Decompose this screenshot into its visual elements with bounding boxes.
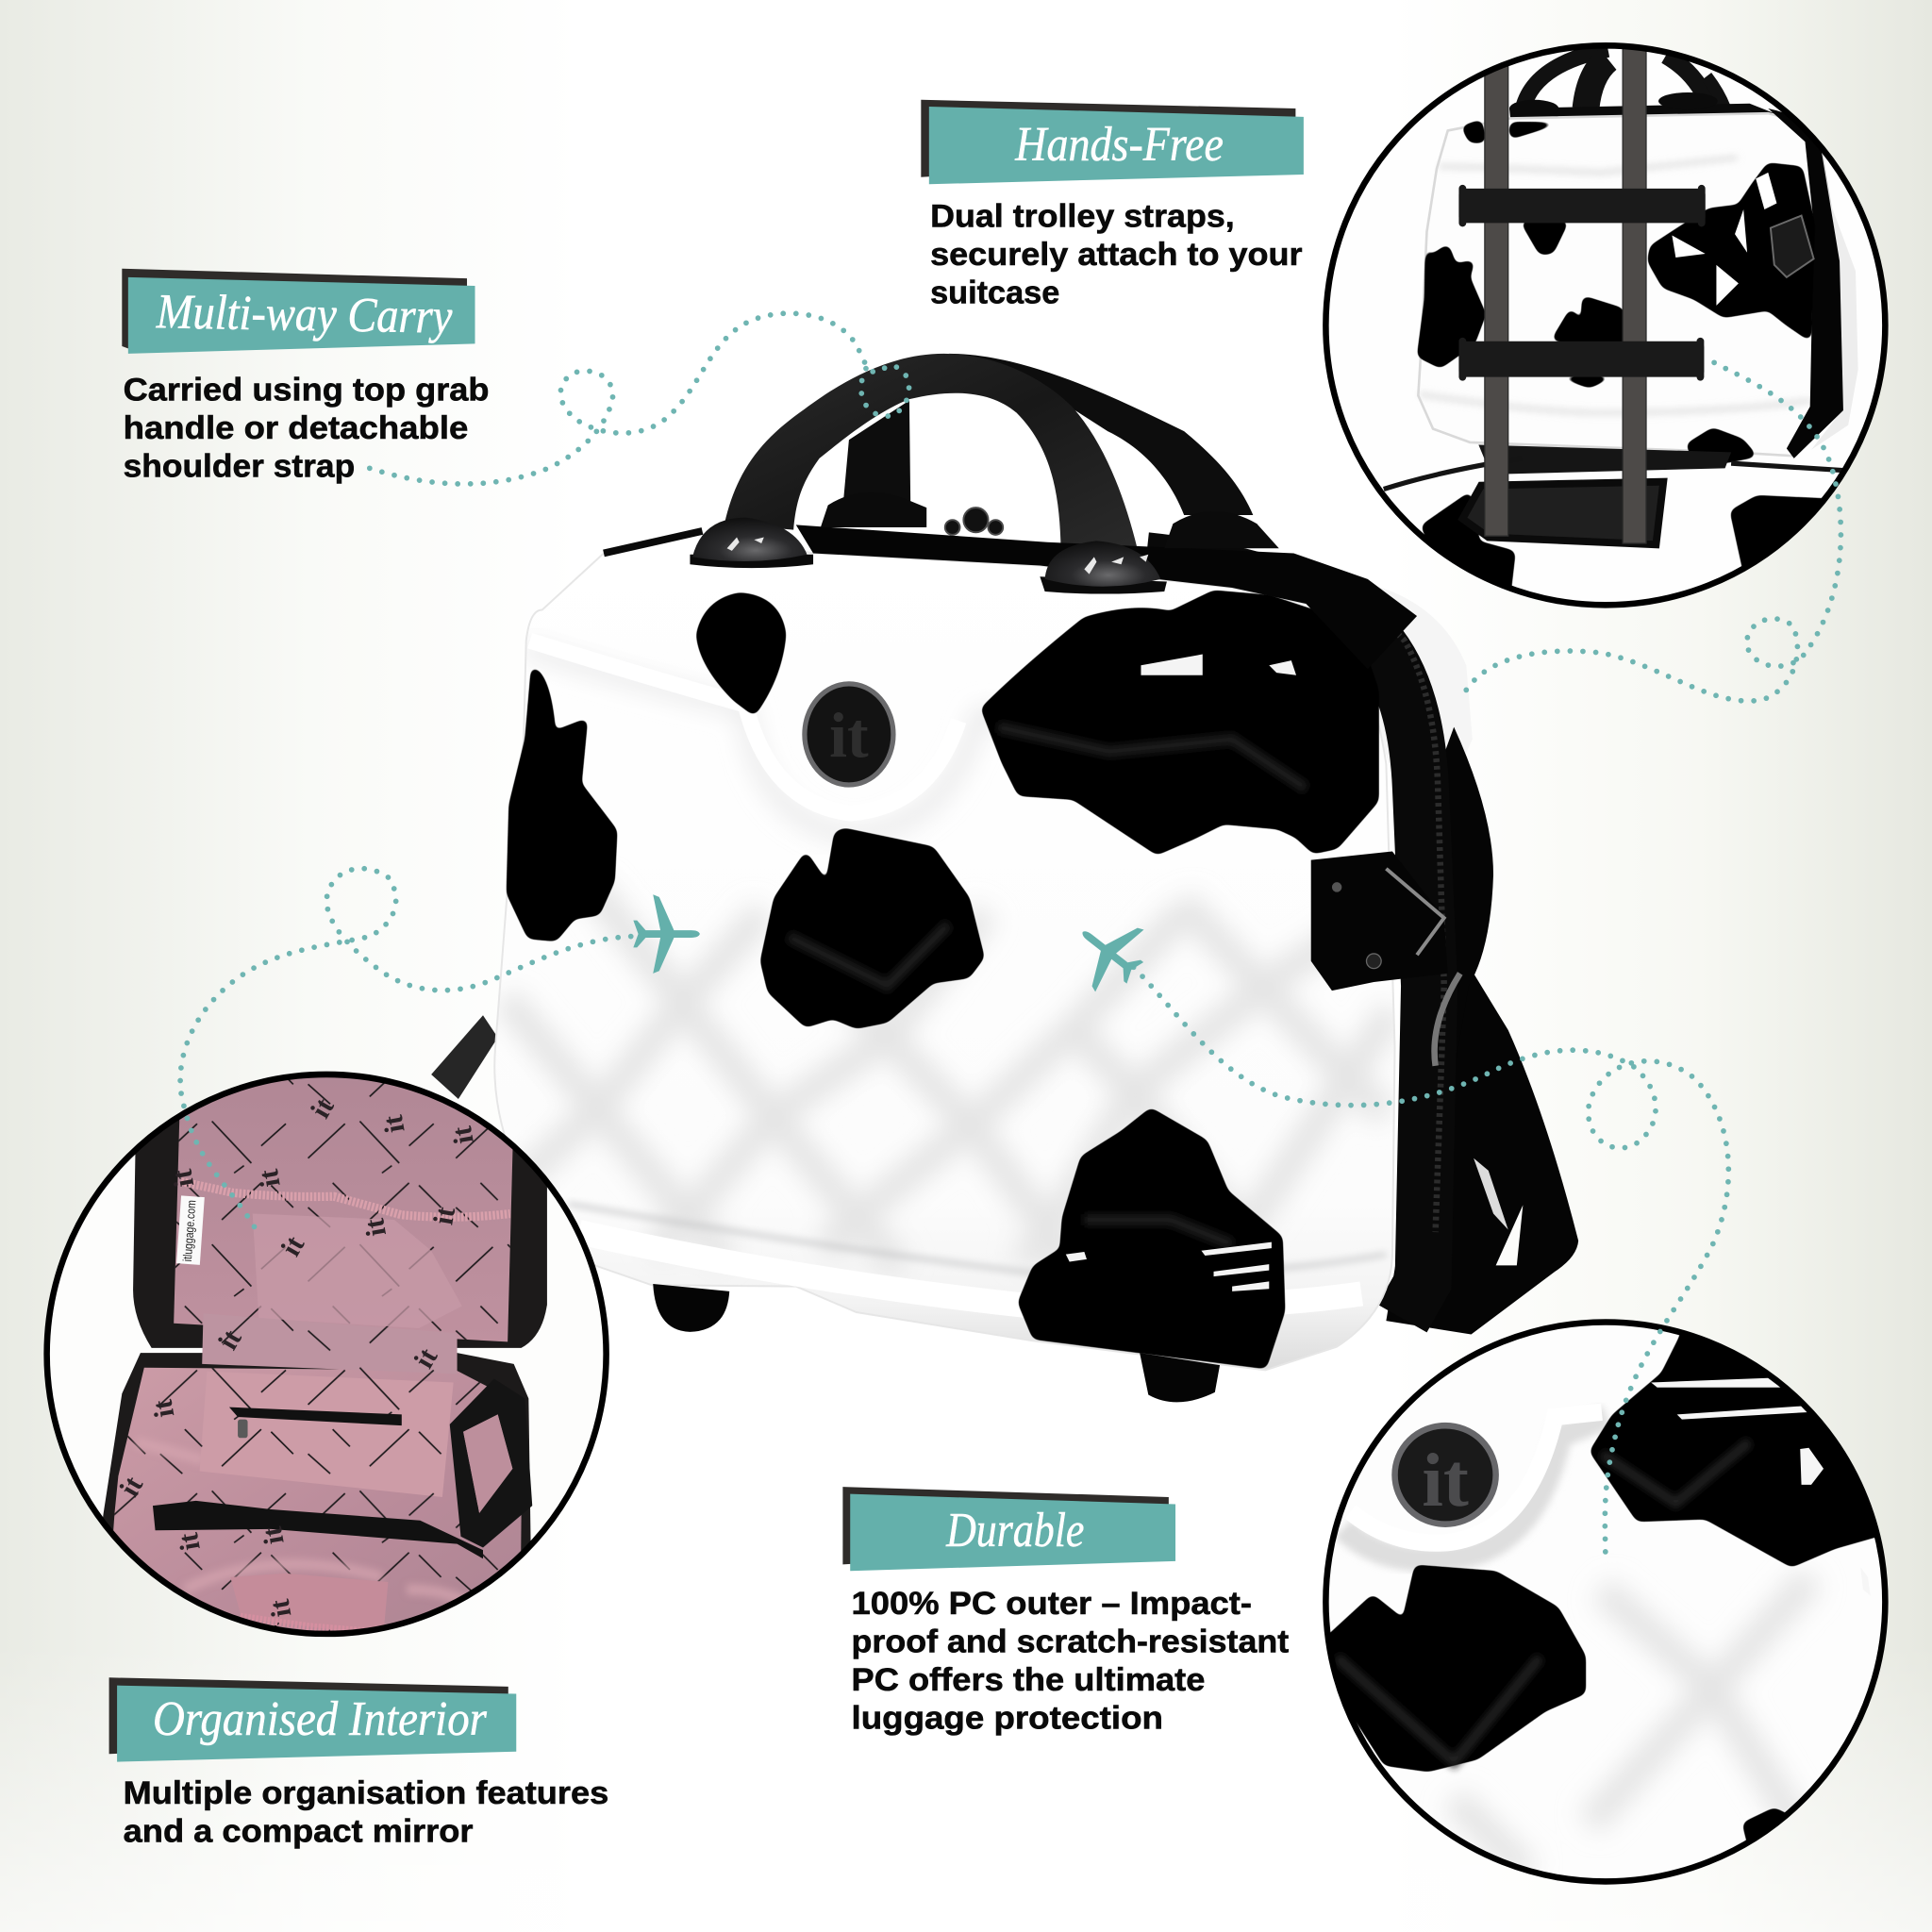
description: proof and scratch-resistant xyxy=(852,1624,1290,1660)
cow patch: large right xyxy=(982,591,1377,854)
elastic pocket xyxy=(253,1214,462,1328)
it logos on lining: it xyxy=(173,1530,207,1553)
panel: hands-free detail circle xyxy=(1319,37,1897,616)
dotted route: multi-way carry xyxy=(370,313,909,484)
elastic strap xyxy=(153,1501,483,1558)
case feet xyxy=(653,1284,1220,1402)
it logos on lining: it xyxy=(377,1113,411,1135)
it logos on lining: it xyxy=(147,1397,180,1420)
back shell dark side xyxy=(1405,727,1493,1109)
back shell xyxy=(1811,185,1858,450)
gloss xyxy=(1672,173,1776,306)
mirror back xyxy=(463,1414,512,1513)
front-left rim line xyxy=(604,531,702,553)
patch reflections xyxy=(789,727,1306,1244)
plane icon: right xyxy=(1058,901,1159,1004)
circle ring xyxy=(1325,45,1885,605)
shoulder strap left xyxy=(431,1015,498,1099)
back shell xyxy=(1343,579,1473,862)
lining folds xyxy=(136,1441,492,1626)
plane icon: left xyxy=(633,894,700,974)
description xyxy=(124,372,490,484)
back handle xyxy=(842,354,1253,515)
brand label xyxy=(176,1195,205,1265)
description: shoulder strap xyxy=(124,448,355,484)
heading banner: Hands-Free xyxy=(1014,117,1224,172)
case front face xyxy=(494,532,1395,1370)
heading banner xyxy=(109,1677,516,1762)
quilting and shading xyxy=(506,641,1392,1307)
gloss highlights xyxy=(1066,655,1296,1291)
patch shading xyxy=(1337,1441,1750,1762)
panel: interior detail circle xyxy=(37,1059,616,1651)
brand label: itluggage.com xyxy=(180,1199,198,1262)
heading banner: Multi-way Carry xyxy=(156,284,454,344)
main product: cow print beauty case xyxy=(431,354,1578,1402)
description: PC offers the ultimate xyxy=(852,1662,1205,1698)
description: luggage protection xyxy=(852,1700,1163,1736)
description: 100% PC outer – Impact- xyxy=(852,1586,1252,1622)
bottom pocket xyxy=(230,1574,388,1637)
shoulder strap right xyxy=(1386,974,1578,1335)
description: suitcase xyxy=(930,275,1059,310)
it logos on lining: it xyxy=(264,1597,297,1620)
circle ring xyxy=(1325,1322,1885,1881)
heading banner: Organised Interior xyxy=(153,1691,488,1746)
trolley rods xyxy=(1485,37,1646,543)
cow patches xyxy=(508,591,1377,1368)
zip flap upper xyxy=(202,1313,458,1374)
it logo badge: it xyxy=(829,699,869,771)
case body xyxy=(1418,113,1840,456)
heading banner xyxy=(921,100,1304,184)
description xyxy=(852,1586,1290,1736)
callout: multi-way carry xyxy=(122,269,490,484)
it logos on lining: it xyxy=(113,1471,149,1502)
top zipper and mounts xyxy=(1509,92,1774,117)
case lock xyxy=(1771,216,1814,277)
case top handles xyxy=(1523,49,1725,108)
it logos on lining xyxy=(113,1092,480,1620)
callout: durable xyxy=(842,1487,1290,1736)
case zipper side xyxy=(1768,108,1843,458)
suitcase patches xyxy=(1422,492,1836,616)
suitcase top edge xyxy=(1384,458,1848,490)
zipper band xyxy=(1146,560,1429,1319)
it logos on lining: it xyxy=(427,1205,461,1227)
quilting xyxy=(1454,1577,1811,1873)
lower lining xyxy=(105,1368,523,1651)
cow patch: centre xyxy=(761,829,983,1027)
lid arch xyxy=(1343,1417,1607,1559)
bottom pocket ruffle xyxy=(241,1617,382,1633)
it logos on lining: it xyxy=(358,1216,392,1239)
dotted route: organised interior xyxy=(180,869,631,1235)
front handle xyxy=(724,354,1138,548)
description xyxy=(930,198,1303,310)
it logos on lining: it xyxy=(305,1092,341,1124)
description: handle or detachable xyxy=(124,410,468,446)
trolley tray xyxy=(1462,482,1663,544)
description: Dual trolley straps, xyxy=(930,198,1235,234)
callout: hands-free xyxy=(921,100,1304,310)
it logo badge: it xyxy=(1422,1438,1469,1523)
zip flap lower xyxy=(200,1372,454,1497)
it logos on lining: it xyxy=(253,1167,287,1190)
panel: durable detail circle xyxy=(1312,1306,1904,1891)
zipper teeth xyxy=(1232,557,1444,1232)
heading banner xyxy=(122,269,475,354)
lower shell frame xyxy=(86,1353,532,1651)
callout: organised interior xyxy=(109,1677,608,1850)
dotted route: durable xyxy=(1134,967,1728,1558)
upper lining xyxy=(174,1059,515,1341)
cow patch: upper xyxy=(697,594,785,715)
description: Multiple organisation features xyxy=(124,1775,608,1811)
it logos on lining: it xyxy=(275,1231,310,1261)
handle mounts xyxy=(690,492,1279,594)
elastic ruffle xyxy=(181,1182,510,1217)
cow patches xyxy=(1312,1306,1904,1848)
gloss highlights xyxy=(1651,1377,1871,1595)
it logos on lining: it xyxy=(212,1324,248,1355)
circle ring xyxy=(47,1074,607,1634)
it logos on lining: it xyxy=(167,1167,200,1190)
heading banner: Durable xyxy=(945,1503,1084,1557)
it logos on lining: it xyxy=(257,1524,291,1547)
description: Carried using top grab xyxy=(124,372,490,408)
case patches xyxy=(1418,121,1814,462)
pocket zipper xyxy=(229,1407,402,1425)
dotted route: hands-free xyxy=(1466,359,1840,701)
heading banner xyxy=(842,1487,1175,1571)
description: securely attach to your xyxy=(930,237,1303,273)
strap gloss xyxy=(1474,1158,1508,1230)
cow patch: lower xyxy=(1019,1109,1284,1368)
upper shell frame xyxy=(133,1066,547,1348)
it logo badge xyxy=(1395,1425,1496,1524)
strap lock bracket xyxy=(1311,852,1460,1066)
zipper clasp xyxy=(945,508,1003,535)
top zipper band xyxy=(796,525,1417,669)
zip pull xyxy=(238,1420,248,1438)
it logos on lining: it xyxy=(408,1343,443,1374)
description: and a compact mirror xyxy=(124,1814,474,1850)
case rim grooves xyxy=(1420,158,1811,413)
it logo badge xyxy=(805,684,893,785)
description xyxy=(124,1775,608,1850)
cow patch: left xyxy=(508,668,616,941)
it logos on lining: it xyxy=(446,1124,480,1146)
trolley straps xyxy=(1458,185,1706,381)
shadow under case xyxy=(1478,445,1731,475)
mirror frame xyxy=(450,1379,532,1547)
